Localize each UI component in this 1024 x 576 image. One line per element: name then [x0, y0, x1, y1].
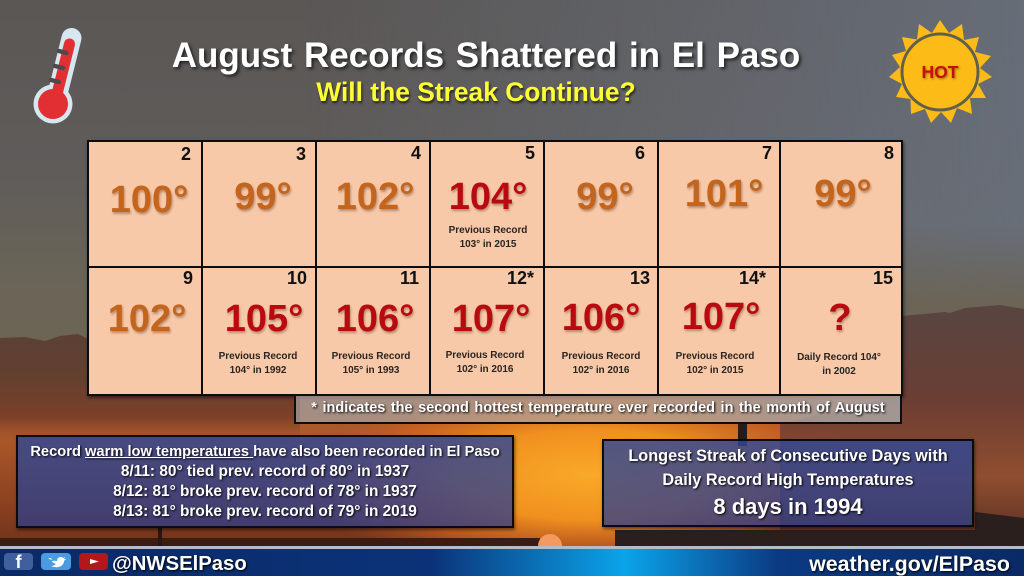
- day 11: [315, 266, 431, 396]
- record lines: 8/12: 81° broke prev. record of 78° in 1937: [113, 482, 417, 500]
- day 11: 11: [400, 268, 419, 288]
- day 3: 3: [296, 144, 306, 164]
- day 10: 10: [287, 268, 307, 288]
- record lines: [113, 462, 419, 522]
- day 13: 106°: [562, 297, 640, 339]
- day 9: [87, 266, 203, 396]
- day 3: [201, 140, 317, 268]
- streak heading: Daily Record High Temperatures: [662, 471, 914, 489]
- day 8: 8: [884, 143, 894, 163]
- day 4: [315, 140, 431, 268]
- day 12: [429, 266, 545, 396]
- day 15: Daily Record 104°: [797, 352, 881, 363]
- day 15: [779, 266, 903, 396]
- streak value: 8 days in 1994: [713, 494, 863, 519]
- day 14: 102° in 2015: [687, 364, 743, 376]
- day 6: [543, 140, 659, 268]
- day 12: Previous Record: [446, 350, 524, 361]
- day 10: 104° in 1992: [230, 364, 286, 376]
- day 13: [543, 266, 659, 396]
- day 8: [779, 140, 903, 268]
- day 3: 99°: [234, 176, 292, 218]
- day 2: 2: [181, 144, 191, 164]
- day 12: 107°: [452, 298, 530, 340]
- day 10: 105°: [225, 298, 303, 340]
- day 12: 102° in 2016: [457, 364, 513, 374]
- day 2: 100°: [110, 179, 188, 221]
- day 15: in 2002: [822, 366, 856, 376]
- day 14: [657, 266, 781, 396]
- day 7: 7: [762, 143, 772, 163]
- streak heading: Longest Streak of Consecutive Days with: [628, 447, 948, 465]
- website: weather.gov/ElPaso: [809, 552, 1010, 576]
- day 12: 12*: [507, 268, 534, 288]
- day 8: 99°: [814, 173, 872, 215]
- calendar grid of daily highs: [87, 140, 903, 396]
- social handle: @NWSElPaso: [112, 553, 247, 575]
- day 5: 5: [525, 143, 535, 163]
- footnote bar: * indicates the second hottest temperature ever recorded in the month of August: [311, 400, 885, 416]
- title: August Records Shattered in El Paso: [172, 36, 800, 75]
- day 14: Previous Record: [676, 351, 754, 362]
- day 9: 9: [183, 268, 193, 288]
- day 9: 102°: [108, 298, 186, 340]
- day 5: 103° in 2015: [460, 238, 516, 250]
- icon: facebook: [4, 553, 33, 570]
- icon: hot sun: HOT: [922, 62, 959, 82]
- day 5: Previous Record: [449, 225, 527, 236]
- day 13: Previous Record: [562, 351, 640, 362]
- icon: youtube: [79, 553, 108, 570]
- day 10: Previous Record: [219, 351, 297, 362]
- day 15: ?: [828, 297, 852, 339]
- panel: record warm lows: [16, 435, 514, 528]
- day 10: [201, 266, 317, 396]
- icon: twitter: [41, 553, 71, 570]
- icon: hot sun: [889, 20, 992, 123]
- streak heading: [628, 447, 950, 491]
- footer bar: [0, 546, 1024, 576]
- day 2: [87, 140, 203, 268]
- day 13: 102° in 2016: [573, 364, 629, 376]
- day 11: 106°: [336, 298, 414, 340]
- panel heading: Record warm low temperatures have also been recorded in El Paso: [30, 444, 500, 460]
- record lines: 8/11: 80° tied prev. record of 80° in 1937: [121, 462, 409, 480]
- panel: longest streak: [602, 439, 974, 527]
- footnote bar: [294, 396, 902, 424]
- day 15: 15: [873, 268, 893, 288]
- day 7: [657, 140, 781, 268]
- icon: thermometer: [34, 28, 82, 124]
- day 11: Previous Record: [332, 351, 410, 362]
- day 6: 99°: [576, 176, 634, 218]
- day 11: 105° in 1993: [343, 364, 399, 376]
- day 4: 4: [411, 143, 421, 163]
- day 5: 104°: [449, 176, 527, 218]
- subtitle: Will the Streak Continue?: [316, 77, 636, 107]
- day 14: 107°: [682, 296, 760, 338]
- day 7: 101°: [685, 173, 763, 215]
- day 4: 102°: [336, 176, 414, 218]
- day 6: 6: [635, 143, 645, 163]
- day 14: 14*: [739, 268, 766, 288]
- record lines: 8/13: 81° broke prev. record of 79° in 2019: [113, 502, 417, 520]
- icon: facebook: f: [16, 552, 22, 572]
- day 13: 13: [630, 268, 650, 288]
- day 5: [429, 140, 545, 268]
